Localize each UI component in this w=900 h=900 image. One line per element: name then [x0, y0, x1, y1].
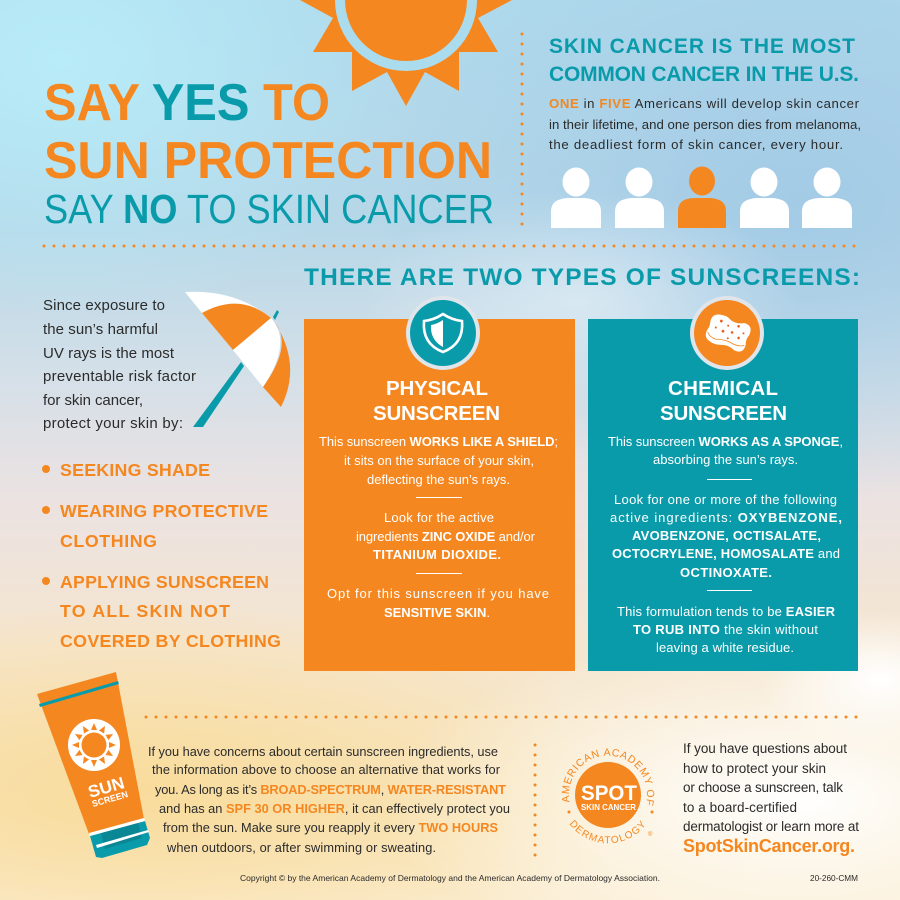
- heading: chemical sunscreen: SUNSCREEN: [660, 402, 787, 425]
- icon: sun: [300, 0, 512, 106]
- logo: American Academy of Dermatology Spot Skin Cancer: [562, 748, 654, 844]
- bullet: seeking shade: SEEKING SHADE: [60, 460, 210, 480]
- physical description: Opt for this sunscreen if you have: [327, 586, 549, 601]
- heading: skin cancer most common: SKIN CANCER IS THE MOST: [549, 35, 855, 58]
- icon: sunscreen tube: SCREEN: [91, 789, 129, 809]
- bullet: protective clothing: [42, 501, 268, 551]
- ingredient advice text: you. As long as it’s BROAD-SPECTRUM, WATER-RESISTANT: [155, 782, 506, 797]
- heading: chemical sunscreen: CHEMICAL: [668, 377, 778, 400]
- dermatologist contact text: If you have questions about: [683, 741, 847, 756]
- logo: American Academy of Dermatology Spot Skin Cancer: SKIN CANCER: [581, 803, 636, 812]
- statistic text: in their lifetime, and one person dies from melanoma,: [549, 117, 861, 132]
- icon: beach umbrella: [185, 292, 290, 427]
- physical description: TITANIUM DIOXIDE.: [373, 547, 501, 562]
- logo: American Academy of Dermatology Spot Skin Cancer: ®: [648, 831, 653, 838]
- physical description: SENSITIVE SKIN.: [384, 605, 490, 620]
- ingredient advice text: from the sun. Make sure you reapply it every TWO HOURS: [163, 820, 498, 835]
- heading: skin cancer most common: [549, 35, 859, 86]
- physical description: deflecting the sun’s rays.: [367, 472, 510, 487]
- icon row: one in five people: [551, 166, 852, 228]
- title: [44, 74, 494, 232]
- ingredient advice text: and has an SPF 30 OR HIGHER, it can effectively protect you: [159, 801, 510, 816]
- heading: physical sunscreen: SUNSCREEN: [373, 402, 500, 425]
- panel: physical sunscreen: [304, 296, 575, 671]
- chemical description: Look for one or more of the following: [614, 492, 837, 507]
- protective actions list: [42, 460, 281, 651]
- intro paragraph: preventable risk factor: [43, 368, 196, 385]
- title line: sun protection: SUN PROTECTION: [44, 132, 492, 190]
- chemical description: TO RUB INTO the skin without: [633, 622, 818, 637]
- statistic text: ONE in FIVE Americans will develop skin cancer: [549, 96, 860, 111]
- intro paragraph: for skin cancer,: [43, 392, 143, 409]
- bullet: applying sunscreen: COVERED BY CLOTHING: [60, 631, 281, 651]
- icon: sunscreen tube: [37, 672, 150, 858]
- physical description: This sunscreen WORKS LIKE A SHIELD;: [319, 434, 558, 449]
- dermatologist contact text: how to protect your skin: [683, 761, 826, 776]
- chemical description: absorbing the sun’s rays.: [653, 452, 798, 467]
- statistic text: the deadliest form of skin cancer, every hour.: [549, 137, 843, 152]
- physical description: it sits on the surface of your skin,: [344, 453, 534, 468]
- statistic text: [549, 96, 861, 152]
- dermatologist contact text: [683, 741, 859, 856]
- physical description: [319, 434, 558, 620]
- ingredient advice text: when outdoors, or after swimming or sweating.: [166, 840, 436, 855]
- bullet: protective clothing: CLOTHING: [60, 531, 157, 551]
- chemical description: This sunscreen WORKS AS A SPONGE,: [608, 434, 843, 449]
- chemical description: This formulation tends to be EASIER: [617, 604, 836, 619]
- heading: chemical sunscreen: [660, 377, 787, 425]
- chemical description: leaving a white residue.: [656, 640, 794, 655]
- physical description: Look for the active: [384, 510, 494, 525]
- logo: American Academy of Dermatology Spot Skin Cancer: DERMATOLOGY: [570, 820, 644, 844]
- title line: say yes to: SAY YES TO: [44, 74, 330, 132]
- heading: physical sunscreen: PHYSICAL: [386, 377, 488, 400]
- chemical description: active ingredients: OXYBENZONE,: [610, 510, 842, 525]
- dermatologist contact text: dermatologist or learn more at: [683, 819, 859, 834]
- heading: skin cancer most common: COMMON CANCER IN THE U.S.: [549, 63, 859, 86]
- ingredient advice text: [148, 744, 510, 855]
- heading: two types of sunscreens: THERE ARE TWO TYPES OF SUNSCREENS:: [304, 264, 860, 291]
- intro paragraph: [43, 297, 196, 432]
- icon: sunscreen tube: SUN: [86, 773, 127, 802]
- bullet: applying sunscreen: APPLYING SUNSCREEN: [60, 572, 269, 592]
- title line: say no to skin cancer: SAY NO TO SKIN CANCER: [44, 186, 494, 232]
- bullet: applying sunscreen: TO ALL SKIN NOT: [60, 601, 230, 621]
- logo: American Academy of Dermatology Spot Skin Cancer: AMERICAN ACADEMY OF: [562, 748, 654, 806]
- icon: shield: [406, 296, 480, 370]
- bullet: applying sunscreen: [42, 572, 281, 651]
- document code: 20-260-CMM: [810, 873, 858, 883]
- physical description: ingredients ZINC OXIDE and/or: [356, 529, 536, 544]
- chemical description: OCTINOXATE.: [680, 565, 772, 580]
- chemical description: AVOBENZONE, OCTISALATE,: [632, 528, 821, 543]
- dermatologist contact text: or choose a sunscreen, talk: [683, 780, 843, 795]
- website link: SpotSkinCancer.org.: [683, 836, 855, 856]
- dermatologist contact text: to a board-certified: [683, 800, 797, 815]
- logo: American Academy of Dermatology Spot Skin Cancer: SPOT: [581, 782, 637, 805]
- ingredient advice text: the information above to choose an alternative that works for: [152, 762, 501, 777]
- panel: chemical sunscreen: [588, 296, 858, 671]
- heading: physical sunscreen: [373, 377, 500, 425]
- chemical description: OCTOCRYLENE, HOMOSALATE and: [612, 546, 840, 561]
- copyright: Copyright © by the American Academy of Dermatology and the American Academy of Dermatology Association.: [240, 873, 660, 883]
- intro paragraph: UV rays is the most: [43, 345, 175, 362]
- ingredient advice text: If you have concerns about certain sunscreen ingredients, use: [148, 744, 498, 759]
- icon: sponge: [690, 296, 764, 370]
- intro paragraph: Since exposure to: [43, 297, 165, 314]
- intro paragraph: protect your skin by:: [43, 415, 183, 432]
- statistic block: [549, 35, 861, 152]
- intro paragraph: the sun’s harmful: [43, 321, 158, 338]
- bullet: protective clothing: WEARING PROTECTIVE: [60, 501, 268, 521]
- chemical description: [608, 434, 843, 655]
